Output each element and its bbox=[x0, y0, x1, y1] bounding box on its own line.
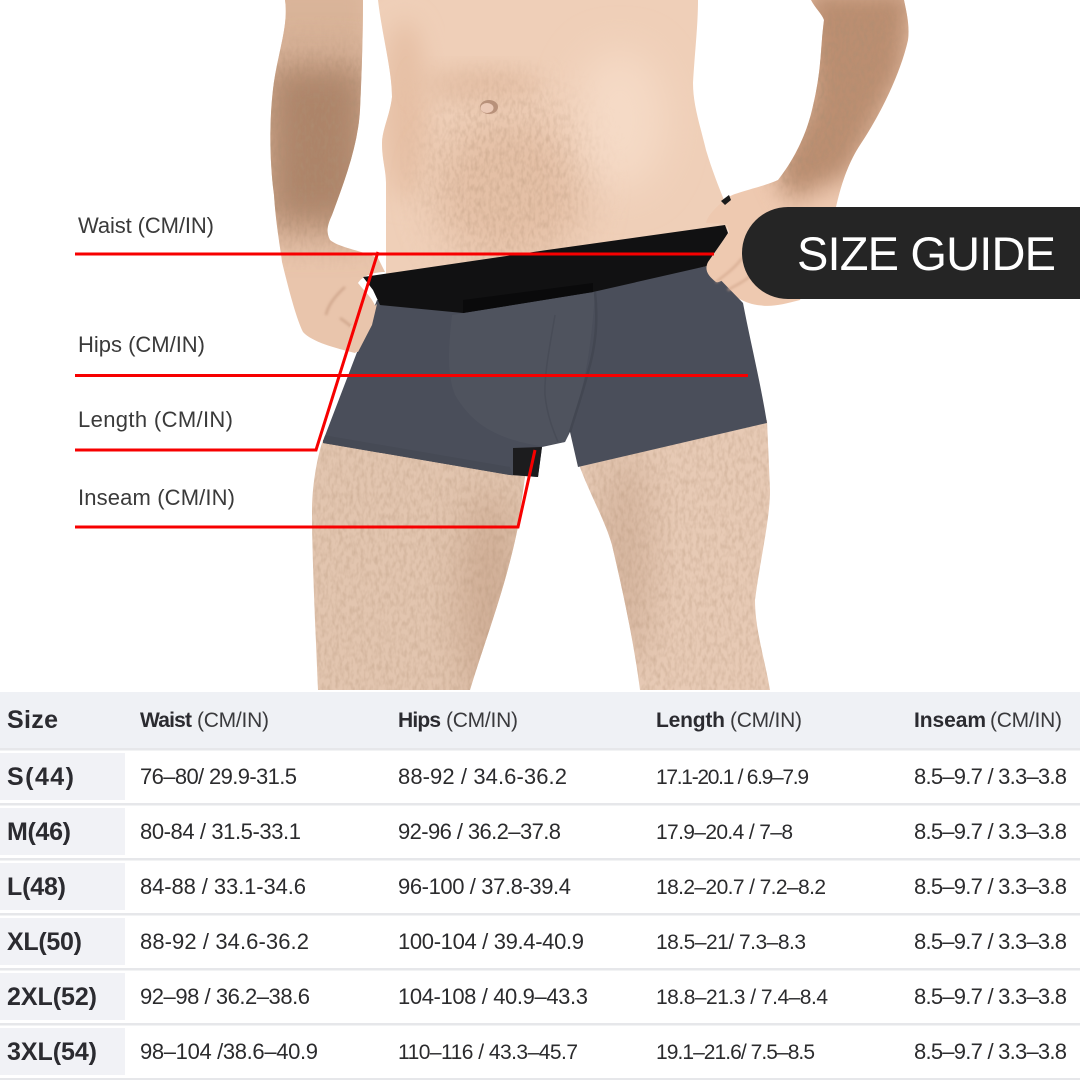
front of left fingers bbox=[344, 304, 377, 352]
label: waist: Waist (CM/IN) bbox=[78, 213, 214, 238]
row: M(46): M(46) bbox=[7, 818, 71, 846]
row: 3XL(54): 98–104 /38.6–40.9 bbox=[140, 1039, 318, 1064]
row: XL(50): 18.5–21/ 7.3–8.3 bbox=[656, 931, 806, 954]
table header: (CM/IN) bbox=[990, 709, 1062, 732]
row: 3XL(54): 110–116 / 43.3–45.7 bbox=[398, 1041, 578, 1064]
right leg bbox=[578, 420, 773, 690]
model photo illustration bbox=[258, 0, 915, 710]
table header: Waist bbox=[140, 709, 192, 732]
measurement line: waist bbox=[75, 252, 714, 256]
row: L(48): 96-100 / 37.8-39.4 bbox=[398, 874, 571, 899]
waistband tab bbox=[721, 195, 731, 205]
navel bbox=[480, 100, 498, 114]
row: S(44): 8.5–9.7 / 3.3–3.8 bbox=[914, 764, 1067, 789]
right arm and hand bbox=[706, 0, 915, 306]
row: M(46): 80-84 / 31.5-33.1 bbox=[140, 819, 301, 844]
row: M(46): 17.9–20.4 / 7–8 bbox=[656, 821, 793, 844]
row dividers bbox=[0, 748, 1080, 1080]
row: 2XL(52) bbox=[0, 973, 1067, 1020]
row: L(48): 84-88 / 33.1-34.6 bbox=[140, 874, 306, 899]
row: L(48): 8.5–9.7 / 3.3–3.8 bbox=[914, 874, 1067, 899]
table header: (CM/IN) bbox=[730, 709, 802, 732]
row: 2XL(52): 18.8–21.3 / 7.4–8.4 bbox=[656, 986, 828, 1009]
row: S(44): S(44) bbox=[7, 763, 74, 791]
row: M(46): 8.5–9.7 / 3.3–3.8 bbox=[914, 819, 1067, 844]
row: M(46): 92-96 / 36.2–37.8 bbox=[398, 819, 561, 844]
row: 2XL(52): 2XL(52) bbox=[7, 983, 97, 1011]
inner gusset bbox=[513, 447, 542, 477]
label: hips: Hips (CM/IN) bbox=[78, 332, 205, 357]
waistband bbox=[363, 225, 728, 313]
table header: Size bbox=[7, 706, 58, 734]
table header bbox=[0, 692, 1080, 749]
row: S(44): 88-92 / 34.6-36.2 bbox=[398, 764, 567, 789]
measurement line: hips bbox=[75, 374, 748, 377]
row: S(44): 76–80/ 29.9-31.5 bbox=[140, 764, 297, 789]
pouch panel bbox=[563, 440, 566, 442]
row: 3XL(54) bbox=[0, 1028, 1067, 1075]
left arm and hand bbox=[258, 0, 385, 353]
fingers over waistband right bbox=[706, 225, 750, 290]
row: XL(50): XL(50) bbox=[7, 928, 82, 956]
size guide banner bbox=[742, 207, 1080, 299]
table header: Hips bbox=[398, 709, 441, 732]
shorts bbox=[323, 266, 767, 477]
row: L(48): 18.2–20.7 / 7.2–8.2 bbox=[656, 876, 826, 899]
measurement line: length bbox=[75, 252, 378, 450]
row: 3XL(54): 8.5–9.7 / 3.3–3.8 bbox=[914, 1039, 1067, 1064]
label: length: Length (CM/IN) bbox=[78, 407, 233, 432]
row: 3XL(54): 19.1–21.6/ 7.5–8.5 bbox=[656, 1041, 815, 1064]
row: 3XL(54): 3XL(54) bbox=[7, 1038, 97, 1066]
row: 2XL(52): 8.5–9.7 / 3.3–3.8 bbox=[914, 984, 1067, 1009]
row: S(44): 17.1-20.1 / 6.9–7.9 bbox=[656, 766, 809, 789]
table header: Inseam bbox=[914, 709, 986, 732]
table header: (CM/IN) bbox=[197, 709, 269, 732]
row: L(48) bbox=[0, 863, 1067, 910]
row: XL(50): 100-104 / 39.4-40.9 bbox=[398, 929, 584, 954]
table header: Length bbox=[656, 709, 725, 732]
row: XL(50) bbox=[0, 918, 1067, 965]
torso bbox=[378, 0, 730, 295]
table header: (CM/IN) bbox=[446, 709, 518, 732]
row: M(46) bbox=[0, 808, 1067, 855]
label: inseam: Inseam (CM/IN) bbox=[78, 485, 235, 510]
measurement line: inseam bbox=[75, 450, 535, 527]
row: 2XL(52): 92–98 / 36.2–38.6 bbox=[140, 984, 310, 1009]
row: S(44) bbox=[0, 753, 1067, 800]
size table bbox=[0, 692, 1080, 1080]
row: L(48): L(48) bbox=[7, 873, 66, 901]
left leg bbox=[312, 440, 526, 690]
row: XL(50): 8.5–9.7 / 3.3–3.8 bbox=[914, 929, 1067, 954]
row: XL(50): 88-92 / 34.6-36.2 bbox=[140, 929, 309, 954]
row: 2XL(52): 104-108 / 40.9–43.3 bbox=[398, 984, 588, 1009]
banner title: SIZE GUIDE bbox=[797, 227, 1056, 280]
